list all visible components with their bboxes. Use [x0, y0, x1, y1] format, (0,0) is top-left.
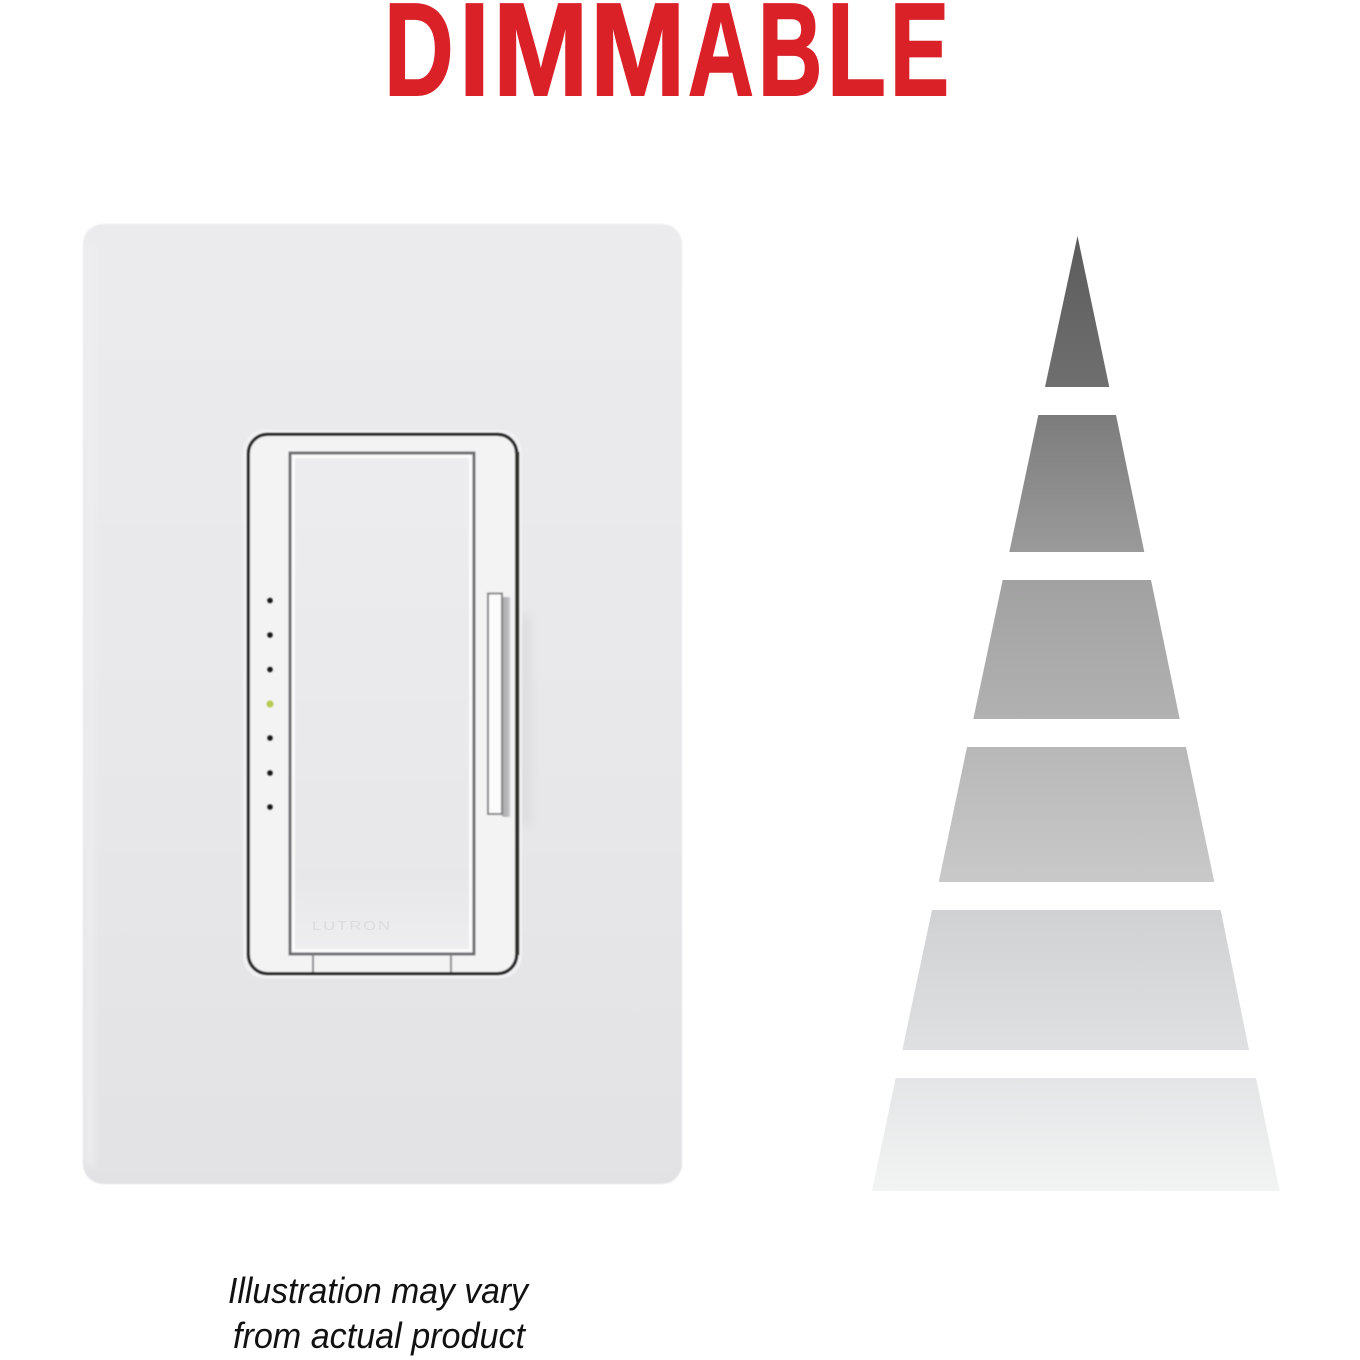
- level 3: [973, 580, 1180, 719]
- title: [384, 0, 949, 123]
- panel: dimmer switch wall plate: [83, 224, 682, 1184]
- frame halo: [244, 431, 520, 977]
- level 4: [939, 747, 1214, 882]
- level 2: [1009, 415, 1144, 552]
- dimmer switch body: [248, 434, 517, 974]
- rocker paddle: [290, 453, 474, 954]
- slider cast shadow: [519, 615, 531, 825]
- chart: stepped dimming pyramid: [872, 236, 1280, 1191]
- slider shadow: [502, 597, 511, 817]
- plate left edge highlight: [86, 245, 94, 1165]
- caption: [228, 1270, 530, 1356]
- brand mark: LUTRON: [312, 918, 392, 933]
- bottom notches: [313, 955, 451, 972]
- level 1: [1045, 236, 1109, 387]
- caption: Illustration may vary: [228, 1270, 530, 1311]
- LED level indicators: [266, 598, 274, 810]
- wall plate: [83, 224, 682, 1184]
- frame right edge: [515, 452, 519, 955]
- paddle highlight: [294, 456, 470, 950]
- caption: from actual product: [233, 1315, 527, 1356]
- level 5: [902, 910, 1249, 1050]
- dimming slider: [488, 594, 502, 814]
- level 6: [872, 1078, 1280, 1191]
